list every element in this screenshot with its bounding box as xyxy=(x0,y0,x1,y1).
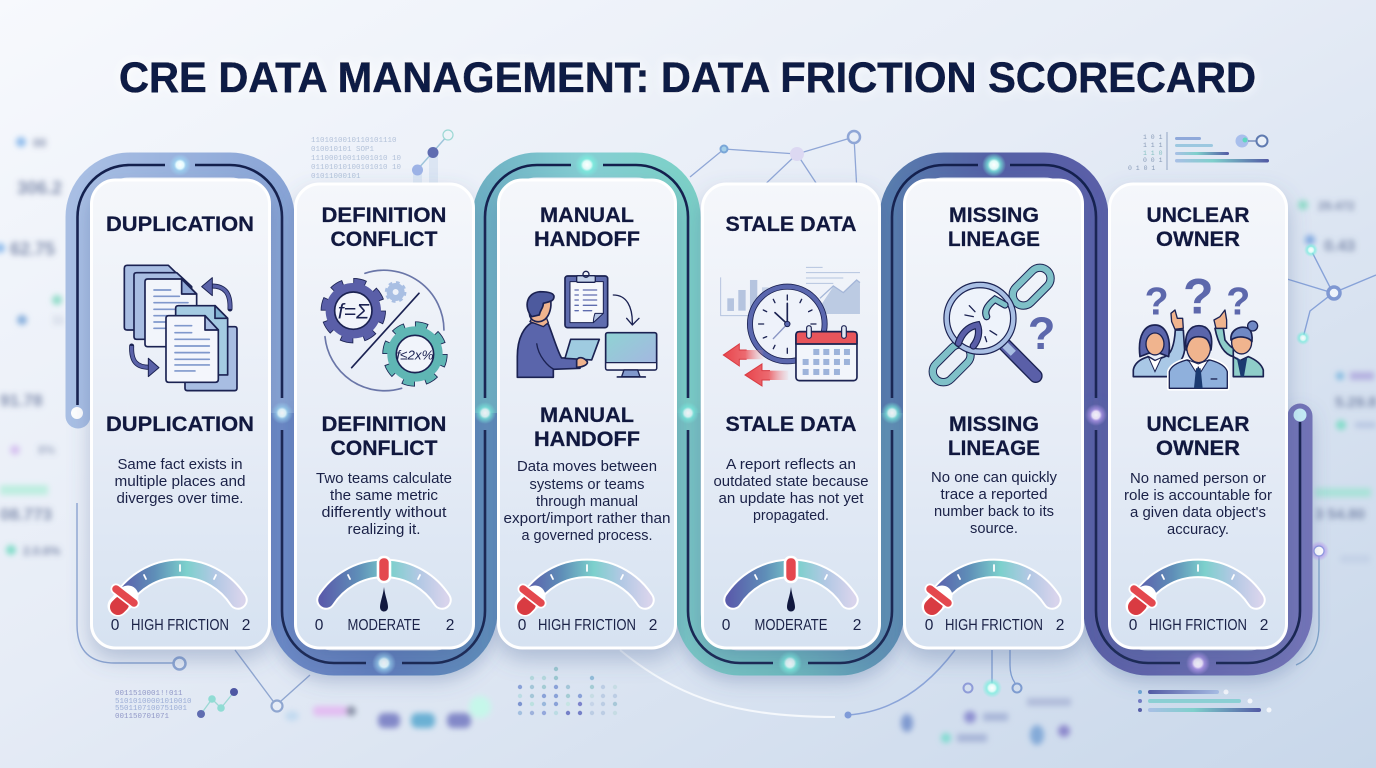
repeated heading: missing lineage: MISSING xyxy=(949,412,1039,436)
connector: long curves bottom centre xyxy=(620,650,955,718)
icon: person handing off from clipboard to computer xyxy=(517,271,657,377)
icon: conflicting gears: f≤2x% xyxy=(396,347,434,362)
blurred data readouts: left edge: 62.75 xyxy=(10,239,55,259)
panel: duplication xyxy=(92,180,270,648)
glowing nodes on tubes xyxy=(71,153,1306,675)
description: manual handoff: systems or teams xyxy=(530,477,644,493)
description: manual handoff xyxy=(504,459,670,544)
description: duplication: Same fact exists in xyxy=(118,457,242,473)
gauge: high friction: HIGH FRICTION xyxy=(945,617,1043,634)
blurred data readouts: right edge: 5.29.8 xyxy=(1335,394,1376,411)
gauge: high friction xyxy=(925,565,1064,634)
heading: missing lineage: LINEAGE xyxy=(948,227,1040,251)
gauge: moderate xyxy=(722,557,861,634)
repeated heading: unclear owner: OWNER xyxy=(1156,436,1240,460)
blurred data readouts: right edge xyxy=(1298,199,1376,563)
blurred data readouts: left edge: 91.78 xyxy=(0,391,43,410)
gauge: high friction: 0 xyxy=(518,617,527,634)
description: stale data xyxy=(714,457,868,524)
description: unclear owner: accuracy. xyxy=(1167,522,1229,538)
gauge: high friction: 0 xyxy=(111,617,120,634)
blurred data readouts: left edge: 306.2 xyxy=(17,178,62,198)
gauge: high friction: 2 xyxy=(1056,617,1064,634)
icon: broken chain under magnifier xyxy=(928,263,1055,387)
binary text and bars: top right: 1 0 1 xyxy=(1143,134,1163,141)
description: definition conflict: realizing it. xyxy=(348,522,420,538)
heading: missing lineage xyxy=(948,203,1040,251)
description: definition conflict: the same metric xyxy=(330,488,438,504)
binary text and mini chart: top left: 010010101 SOP1 xyxy=(311,146,375,154)
description: manual handoff: a governed process. xyxy=(522,528,652,544)
description: stale data: outdated state because xyxy=(714,474,868,490)
binary text and mini chart: top left: 11100010011001010 10 xyxy=(311,155,402,163)
repeated heading: unclear owner: UNCLEAR xyxy=(1146,412,1250,436)
gauge: high friction: 0 xyxy=(925,617,934,634)
legend bars: bottom right xyxy=(1138,690,1272,712)
icon: three people with question marks xyxy=(1133,268,1263,388)
connector: right lead line xyxy=(1296,541,1329,665)
blurred data readouts: left edge: 2.0.6% xyxy=(23,544,61,558)
icon: conflicting gears xyxy=(324,270,444,391)
repeated heading: stale data: STALE DATA xyxy=(726,412,856,436)
blurred data readouts: left edge: 11 xyxy=(52,313,65,327)
repeated heading: unclear owner xyxy=(1146,412,1250,460)
description: manual handoff: export/import rather than xyxy=(504,511,670,527)
blurred data readouts: right edge: 3 54.80 xyxy=(1315,506,1365,523)
gauge: moderate: 2 xyxy=(853,617,861,634)
repeated heading: duplication: DUPLICATION xyxy=(106,412,254,436)
repeated heading: manual handoff xyxy=(534,403,640,451)
gauge: moderate: 0 xyxy=(722,617,731,634)
gauge: moderate: MODERATE xyxy=(348,617,420,634)
binary text and mini chart: top left: 01011000101 xyxy=(311,173,361,181)
heading: unclear owner: OWNER xyxy=(1156,227,1240,251)
icon: duplicated documents xyxy=(124,265,237,391)
panel: definition conflict xyxy=(296,184,474,648)
binary text: bottom left: 5501107100751001 xyxy=(115,705,188,713)
connector: lower left lead line xyxy=(77,503,186,670)
description: definition conflict: differently without xyxy=(322,505,446,521)
gauge: high friction xyxy=(1129,565,1268,634)
connector tube: card 6 cradle xyxy=(1096,413,1300,663)
panel: unclear owner xyxy=(1110,184,1286,648)
binary text: bottom left: 0011510001!!011 xyxy=(115,690,183,698)
blurred data readouts: left edge xyxy=(0,136,65,558)
gauge: high friction: HIGH FRICTION xyxy=(1149,617,1247,634)
description: stale data: an update has not yet xyxy=(718,491,864,507)
gauge: moderate: 2 xyxy=(446,617,454,634)
heading: unclear owner: UNCLEAR xyxy=(1146,203,1250,227)
binary text and mini chart: top left xyxy=(311,130,453,192)
heading: manual handoff: MANUAL xyxy=(540,203,634,227)
description: missing lineage: trace a reported xyxy=(940,487,1048,503)
description: definition conflict: Two teams calculate xyxy=(316,471,452,487)
connector tube: card 4 cradle xyxy=(688,413,892,663)
icon: outdated clock, calendar and charts xyxy=(721,267,860,386)
gauge: high friction: 2 xyxy=(242,617,250,634)
nodes and leads under card five xyxy=(964,650,1022,698)
description: unclear owner: a given data object's xyxy=(1130,505,1266,521)
description: manual handoff: Data moves between xyxy=(517,459,657,475)
repeated heading: manual handoff: MANUAL xyxy=(540,403,634,427)
description: stale data: propagated. xyxy=(753,508,829,524)
gauge: high friction: 2 xyxy=(1260,617,1268,634)
blurred data readouts: bottom xyxy=(285,696,1071,745)
connector tube: card 2 cradle xyxy=(282,413,485,663)
binary text and bars: top right: 1 1 0 xyxy=(1143,150,1163,157)
gauge: high friction xyxy=(518,565,657,634)
network: top centre xyxy=(690,131,860,192)
repeated heading: definition conflict: CONFLICT xyxy=(330,436,438,460)
heading: duplication: DUPLICATION xyxy=(106,212,254,236)
heading: unclear owner xyxy=(1146,203,1250,251)
heading: definition conflict: CONFLICT xyxy=(330,227,438,251)
gauge: high friction: 2 xyxy=(649,617,657,634)
description: missing lineage: source. xyxy=(970,521,1018,537)
description: missing lineage: No one can quickly xyxy=(931,470,1058,486)
heading: manual handoff: HANDOFF xyxy=(534,227,640,251)
heading: definition conflict: DEFINITION xyxy=(322,203,446,227)
icon: broken chain under magnifier: ? xyxy=(1028,308,1055,359)
binary text and bars: top right xyxy=(1128,132,1269,172)
heading: definition conflict xyxy=(322,203,446,251)
panel: stale data xyxy=(702,184,880,648)
repeated heading: definition conflict: DEFINITION xyxy=(322,412,446,436)
gauge: high friction: HIGH FRICTION xyxy=(538,617,636,634)
dot grid: bottom centre xyxy=(518,667,617,715)
description: unclear owner: role is accountable for xyxy=(1124,488,1272,504)
description: unclear owner xyxy=(1124,471,1272,538)
binary text: bottom left: 51010100001010010 xyxy=(115,698,192,706)
description: stale data: A report reflects an xyxy=(726,457,856,473)
mini chart: bottom left xyxy=(197,688,238,718)
panel: missing lineage xyxy=(904,180,1082,648)
connector tube: card 3 arch xyxy=(485,165,688,413)
binary text and mini chart: top left: 01101010100101010 10 xyxy=(311,164,402,172)
gauge: moderate: 0 xyxy=(315,617,324,634)
gauge: moderate xyxy=(315,557,454,634)
gauge: moderate: MODERATE xyxy=(754,617,828,634)
description: unclear owner: No named person or xyxy=(1130,471,1266,487)
binary text and bars: top right: 0 1 0 1 xyxy=(1128,165,1155,172)
blurred data readouts: left edge: 00 xyxy=(33,136,47,150)
icon: three people with question marks: ? xyxy=(1226,280,1250,324)
heading: missing lineage: MISSING xyxy=(949,203,1039,227)
description: definition conflict xyxy=(316,471,452,538)
binary text: bottom left: 001150701071 xyxy=(115,713,170,721)
heading: stale data: STALE DATA xyxy=(726,212,856,236)
blurred data readouts: right edge: 29.472 xyxy=(1318,199,1355,213)
gauge: high friction xyxy=(111,565,250,634)
icon: three people with question marks: ? xyxy=(1145,280,1169,324)
description: manual handoff: through manual xyxy=(536,494,638,510)
icon: conflicting gears: f=Σ xyxy=(338,299,370,323)
panel: manual handoff xyxy=(498,180,676,648)
heading: manual handoff xyxy=(534,203,640,251)
blurred data readouts: left edge: 08.773 xyxy=(0,505,52,524)
description: duplication xyxy=(114,457,246,507)
binary text and bars: top right: 1 1 1 xyxy=(1143,142,1163,149)
description: missing lineage: number back to its xyxy=(934,504,1054,520)
description: duplication: multiple places and xyxy=(114,474,246,490)
repeated heading: missing lineage xyxy=(948,412,1040,460)
blurred data readouts: right edge: 0.43 xyxy=(1324,238,1355,255)
binary text: bottom left xyxy=(115,690,192,721)
repeated heading: manual handoff: HANDOFF xyxy=(534,427,640,451)
gauge: high friction: 0 xyxy=(1129,617,1138,634)
title: CRE DATA MANAGEMENT: DATA FRICTION SCORECARD xyxy=(119,55,1256,102)
binary text and bars: top right: 0 0 1 xyxy=(1143,157,1163,164)
network: bottom left node xyxy=(235,650,310,712)
blurred data readouts: left edge: 8% xyxy=(38,443,56,457)
description: duplication: diverges over time. xyxy=(116,491,244,507)
description: missing lineage xyxy=(931,470,1058,537)
repeated heading: definition conflict xyxy=(322,412,446,460)
repeated heading: missing lineage: LINEAGE xyxy=(948,436,1040,460)
network: right side xyxy=(1287,243,1376,345)
connector tube: card 1 arch xyxy=(77,165,282,416)
connector tube: card 5 arch xyxy=(892,165,1096,413)
icon: three people with question marks: ? xyxy=(1183,268,1214,324)
gauge: high friction: HIGH FRICTION xyxy=(131,617,229,634)
binary text and mini chart: top left: 1101010010110101110 xyxy=(311,137,397,145)
